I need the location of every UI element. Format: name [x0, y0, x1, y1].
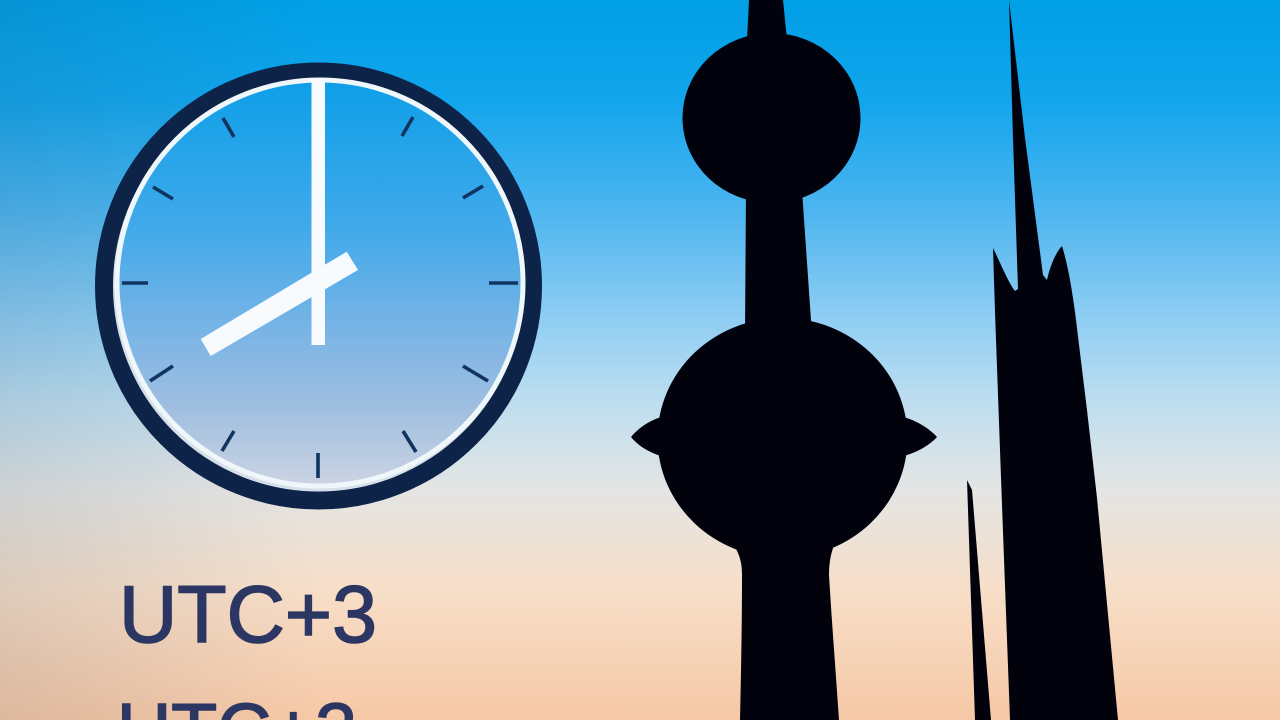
silhouette: small distant spire [967, 480, 991, 720]
silhouette: tall spire tower [993, 0, 1118, 720]
text: UTC+3 label: UTC+3 [119, 570, 377, 660]
clock face with white ring [117, 80, 523, 486]
hour hand [201, 252, 358, 356]
clock outer dark rim [104, 72, 533, 500]
silhouette: Kuwait Towers main tower [631, 0, 937, 720]
hour tick marks [122, 117, 518, 478]
minute hand [312, 79, 325, 345]
upper shaft [745, 190, 812, 335]
tower antenna [747, 0, 787, 40]
main sphere [658, 318, 908, 558]
left and right sphere rim [631, 416, 665, 457]
icon: wall clock showing 8 o'clock [104, 72, 533, 500]
upper sphere [682, 33, 860, 203]
lower shaft [730, 540, 839, 720]
